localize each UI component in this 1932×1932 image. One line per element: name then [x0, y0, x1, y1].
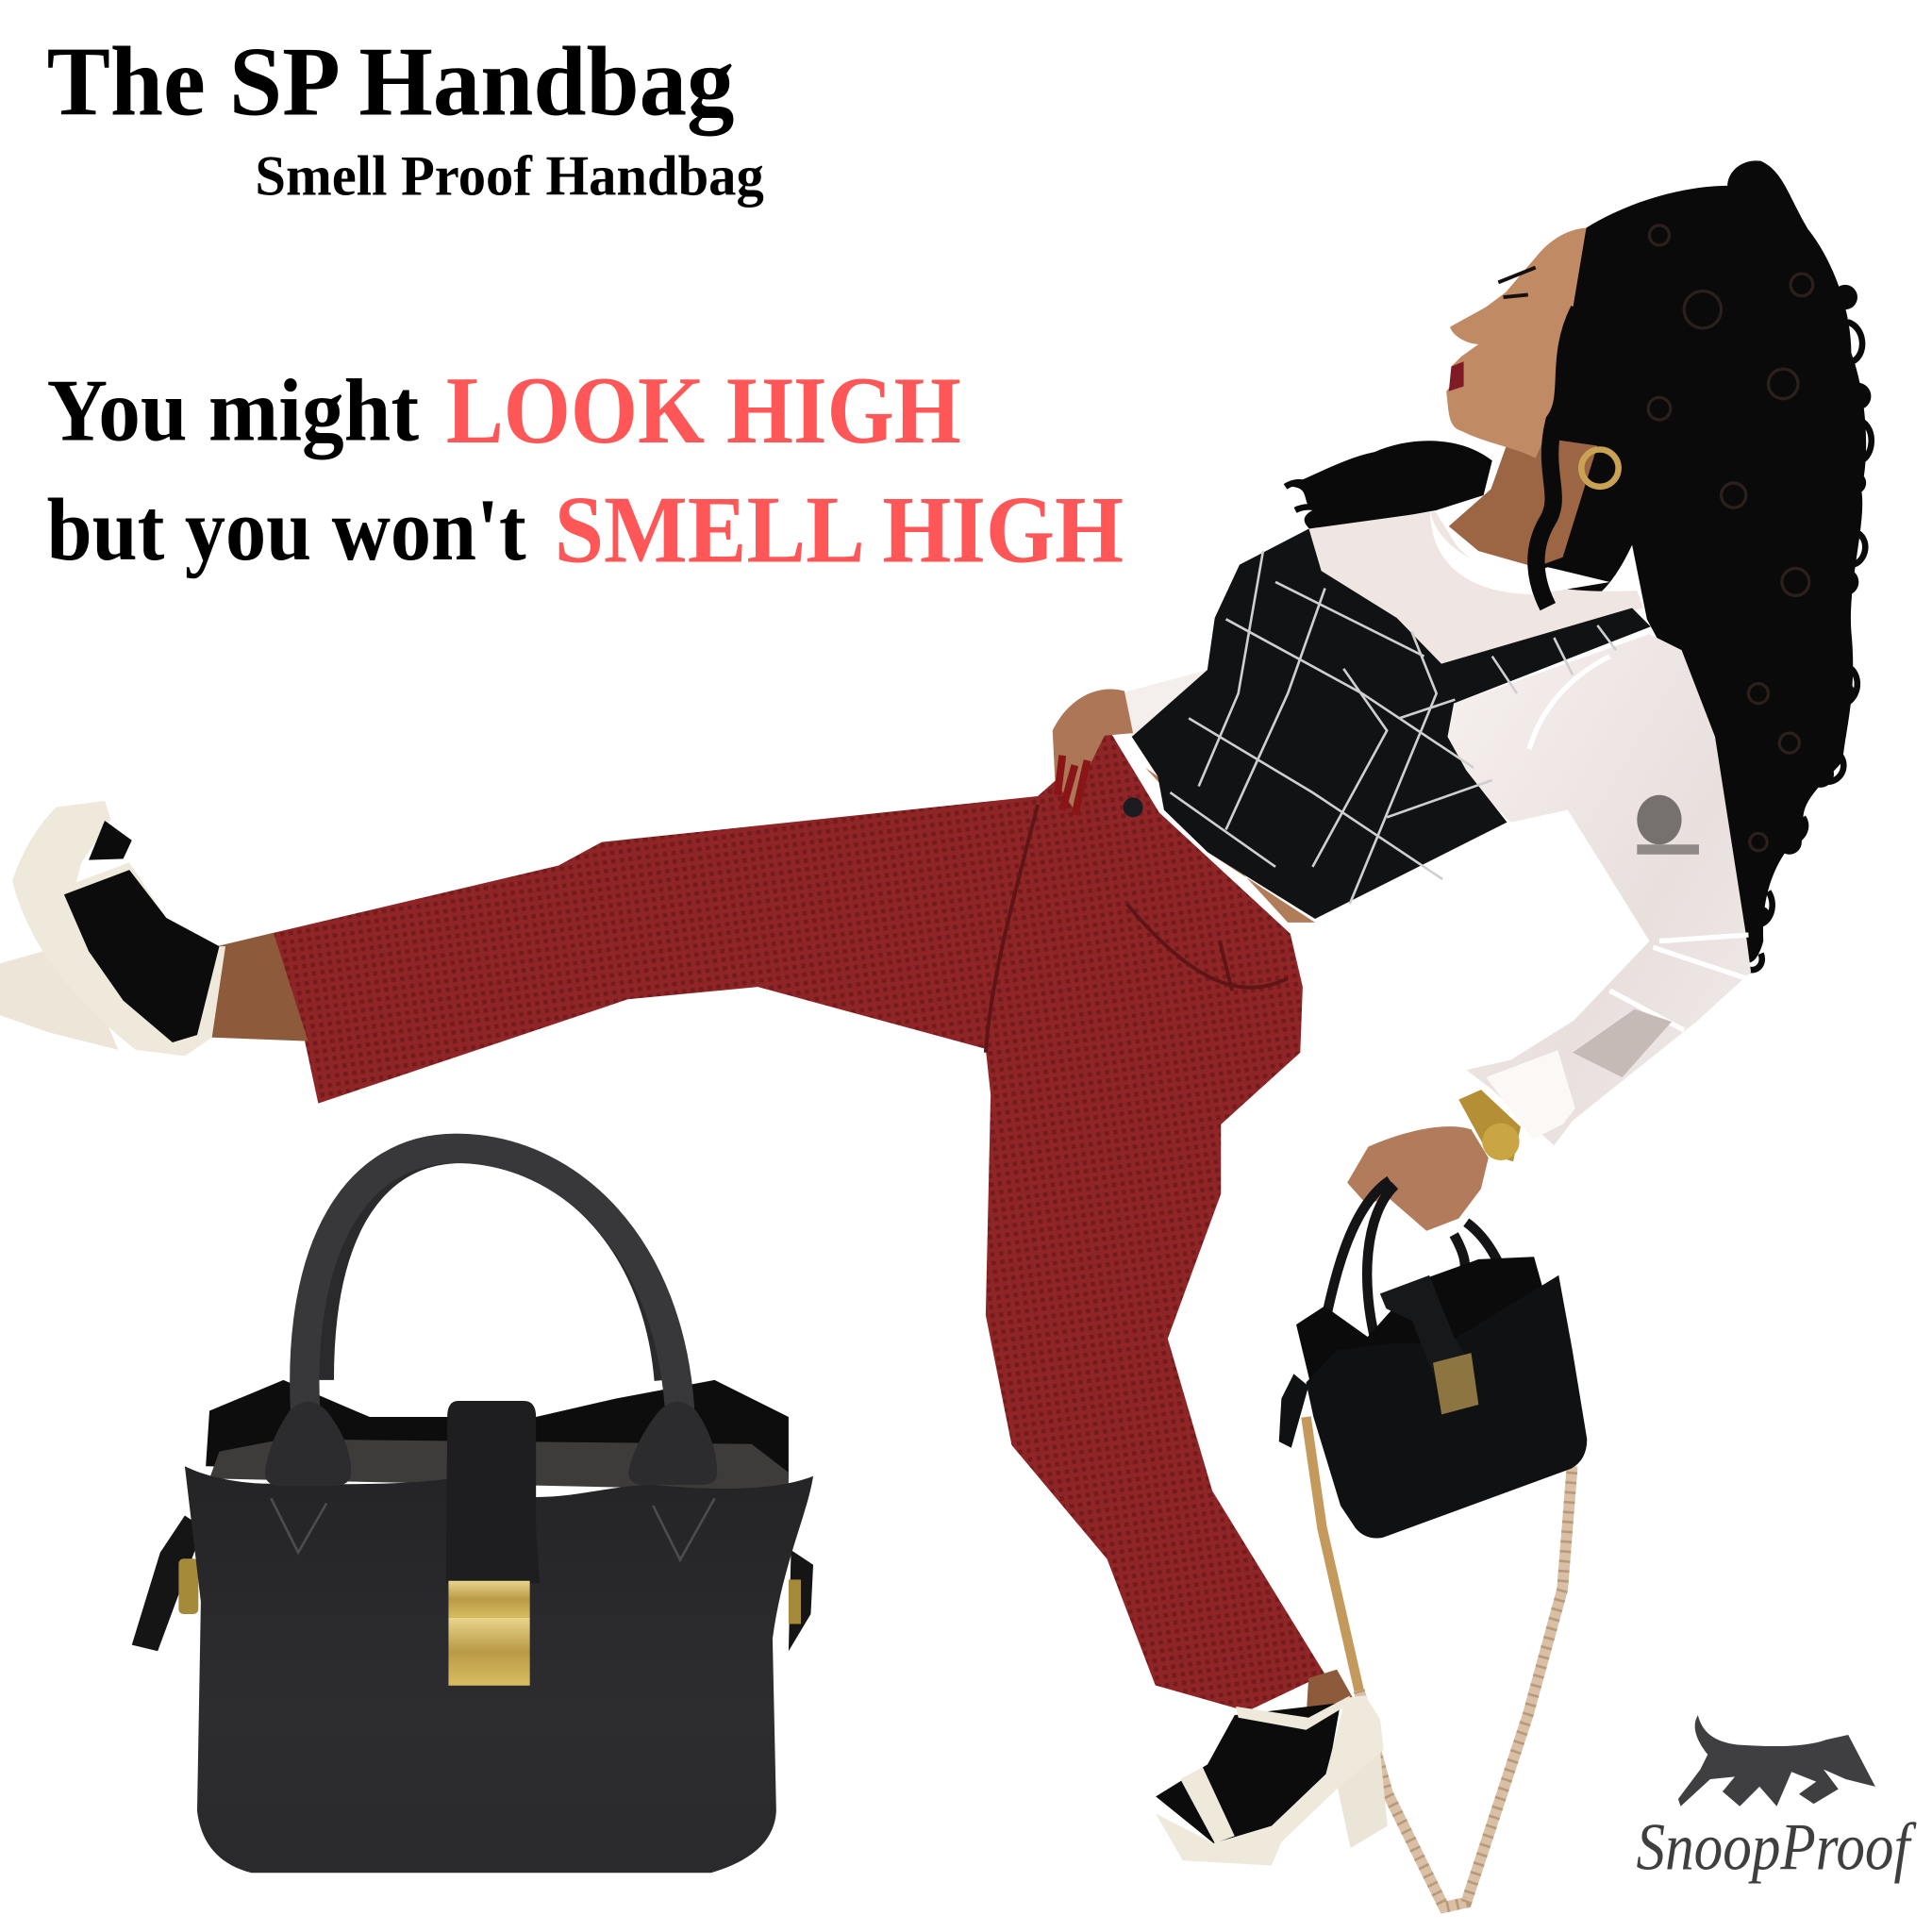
neck and chest skin [1449, 433, 1597, 567]
slogan line 2: but you won't [47, 481, 526, 579]
zipper [209, 1440, 789, 1491]
slogan line 2 [47, 477, 1124, 584]
main handbag [132, 1148, 813, 1873]
slogan line 1: LOOK HIGH [446, 358, 961, 464]
face [1446, 228, 1587, 458]
slogan line 2: SMELL HIGH [555, 477, 1124, 584]
raised shoe [0, 801, 225, 1056]
front curls [1536, 309, 1579, 607]
clasp [1433, 1353, 1478, 1414]
handle bases [265, 1402, 717, 1486]
sleeve cuff [1486, 1050, 1575, 1140]
hand holding bag [1347, 1126, 1489, 1231]
chain [1306, 1417, 1573, 1907]
face details [1449, 268, 1536, 391]
bag body [185, 1466, 813, 1873]
side strap left [132, 1516, 204, 1651]
handles [1321, 1180, 1513, 1349]
gold clasp [448, 1581, 530, 1686]
far sleeve [1120, 670, 1208, 738]
rear handle [323, 1152, 665, 1380]
closure strap [446, 1401, 540, 1583]
waist skin [1145, 768, 1315, 923]
slogan line 1 [47, 358, 961, 464]
rear of bag [1296, 1257, 1558, 1417]
zip pull [1279, 1374, 1308, 1448]
trouser folds [986, 805, 1288, 1053]
raised leg skin [212, 933, 308, 1041]
watch [1458, 1090, 1521, 1161]
sleeve highlights and tattoos [1529, 657, 1748, 1077]
button [1124, 797, 1143, 817]
earring [1581, 449, 1619, 487]
icon: panther [1678, 1715, 1875, 1807]
stitching [271, 1498, 715, 1560]
bag interior [206, 1380, 789, 1478]
subtitle: Smell Proof Handbag [255, 143, 764, 207]
slogan line 1: You might [47, 361, 419, 459]
model upper body and trousers [270, 160, 1872, 1711]
standing leg shoe [1156, 1670, 1388, 1865]
mesh chest panel [1308, 511, 1643, 664]
title: The SP Handbag [47, 26, 734, 136]
bag body [1306, 1275, 1587, 1538]
front handle [305, 1148, 680, 1417]
small handbag [1279, 1180, 1587, 1907]
hand on hip [1053, 690, 1133, 815]
neck collar [1430, 510, 1609, 594]
trousers [270, 730, 1325, 1711]
hair [1286, 160, 1872, 970]
strap [1380, 1275, 1469, 1380]
side strap right [789, 1550, 813, 1651]
corset [1132, 529, 1651, 919]
logo: SnoopProof [1637, 1715, 1917, 1884]
sleeve: near arm [1447, 634, 1751, 1145]
